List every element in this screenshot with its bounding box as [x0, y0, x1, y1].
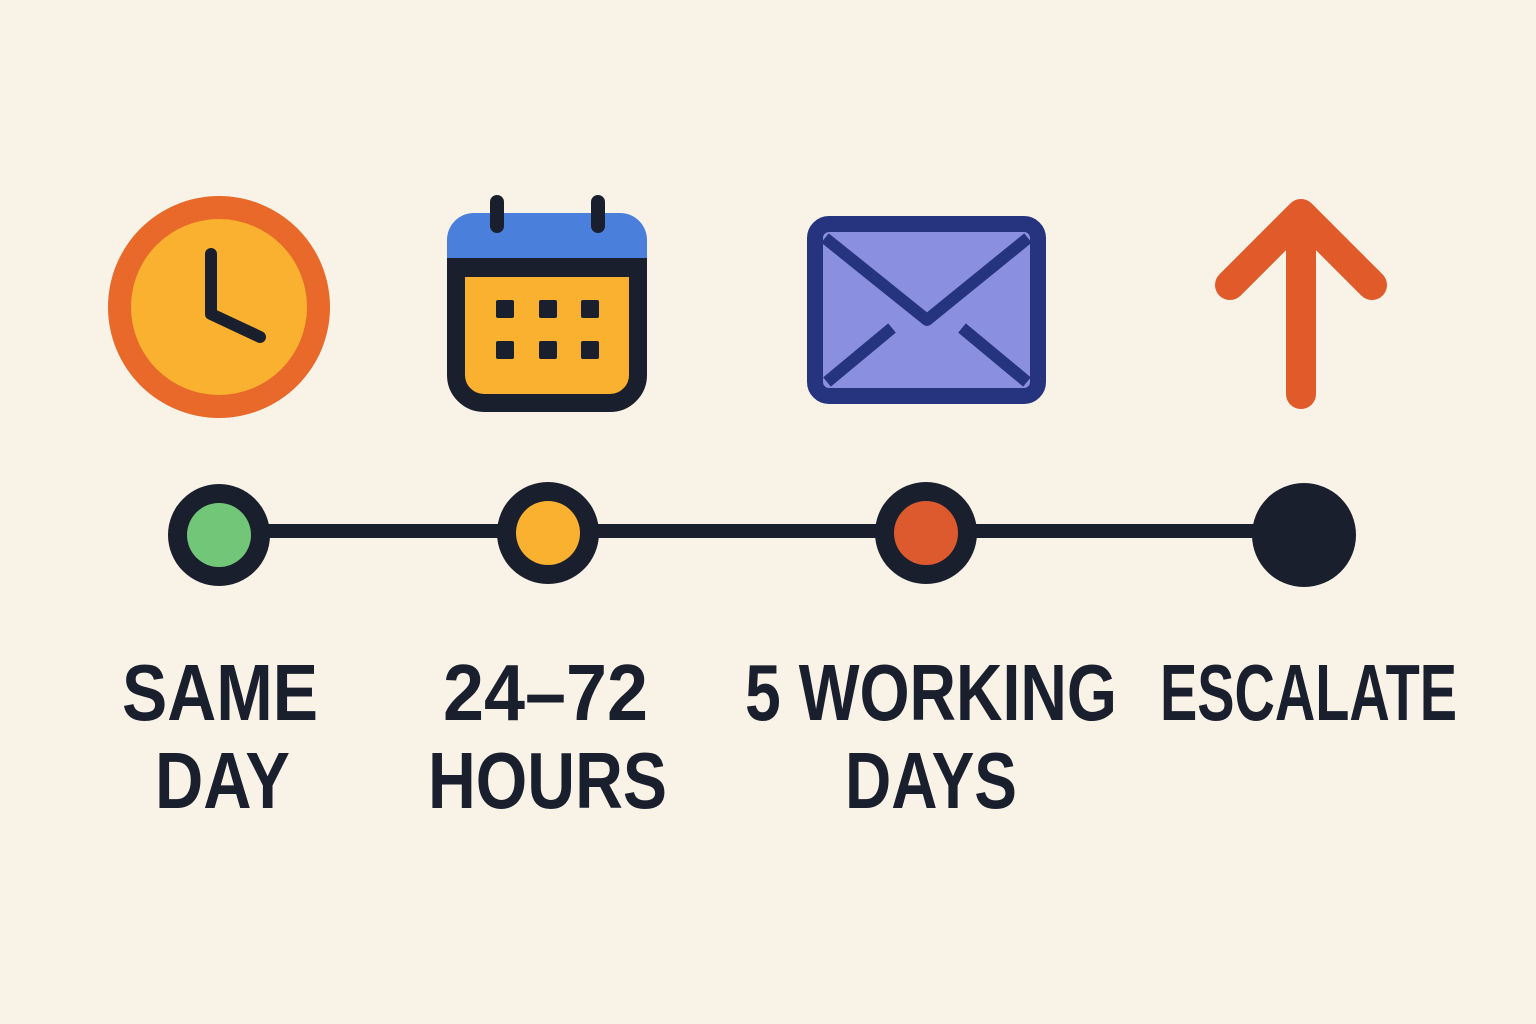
milestone: dark	[1252, 483, 1356, 587]
icon: calendar	[447, 195, 647, 403]
label: 24-72 hours: HOURS	[428, 736, 667, 825]
label: 5 working days: DAYS	[845, 736, 1017, 825]
label: 24-72 hours	[428, 648, 667, 825]
label: 5 working days	[745, 648, 1117, 825]
milestone: green	[168, 484, 270, 586]
label: 24-72 hours: 24–72	[443, 648, 648, 737]
label: same day	[122, 648, 318, 825]
milestone: yellow	[497, 482, 599, 584]
timeline	[168, 482, 1356, 587]
icon: clock	[108, 196, 330, 418]
icon: arrow up	[1230, 214, 1372, 394]
milestone: orange	[875, 482, 977, 584]
label: same day: SAME	[122, 648, 318, 737]
label: same day: DAY	[155, 736, 290, 825]
icon: envelope	[815, 224, 1038, 396]
label: 5 working days: 5 WORKING	[745, 648, 1117, 737]
